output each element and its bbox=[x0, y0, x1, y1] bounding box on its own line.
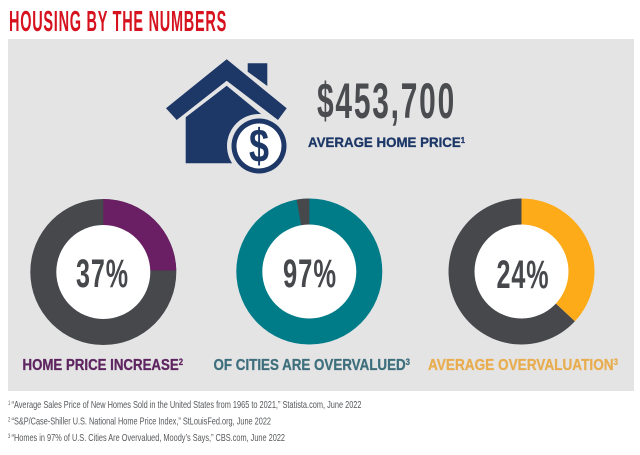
footnotes: 1 bbox=[8, 401, 12, 407]
label: average overvaluation: 3 bbox=[614, 357, 618, 367]
footnotes bbox=[8, 399, 362, 444]
average home price label: AVERAGE HOME PRICE bbox=[308, 134, 469, 150]
donut chart: 97% of cities overvalued bbox=[236, 198, 382, 344]
donut chart: 24% average overvaluation: 24% bbox=[496, 253, 550, 297]
panel: statistics background bbox=[8, 39, 634, 391]
icon: house with dollar coin bbox=[166, 59, 291, 178]
footnotes: “Average Sales Price of New Homes Sold in the United States from 1965 to 2021,” Statista.com, June 2022 bbox=[12, 399, 362, 411]
label: average overvaluation: AVERAGE OVERVALUATION bbox=[428, 357, 640, 374]
footnotes: 3 bbox=[8, 434, 12, 440]
footnotes: “Homes in 97% of U.S. Cities Are Overvalued, Moody’s Says,” CBS.com, June 2022 bbox=[12, 432, 285, 444]
average home price label: 1 bbox=[461, 136, 466, 145]
label: home price increase: HOME PRICE INCREASE bbox=[22, 357, 205, 374]
label: of cities are overvalued: OF CITIES ARE OVERVALUED bbox=[214, 357, 436, 374]
label: home price increase: 2 bbox=[179, 357, 183, 367]
donut chart: 37% home price increase: 37% bbox=[76, 252, 129, 296]
footnotes: 2 bbox=[8, 418, 12, 424]
icon: house with dollar coin: $ bbox=[249, 119, 269, 172]
label: of cities are overvalued: 3 bbox=[406, 357, 410, 367]
footnotes: “S&P/Case-Shiller U.S. National Home Price Index,” StLouisFed.org, June 2022 bbox=[12, 416, 271, 428]
average home price figure: $453,700 bbox=[317, 73, 456, 129]
donut chart: 97% of cities overvalued: 97% bbox=[283, 252, 337, 296]
infographic: HOUSING BY THE NUMBERS bbox=[9, 6, 227, 38]
donut chart: 24% average overvaluation bbox=[449, 198, 595, 344]
donut chart: 37% home price increase bbox=[30, 199, 176, 345]
